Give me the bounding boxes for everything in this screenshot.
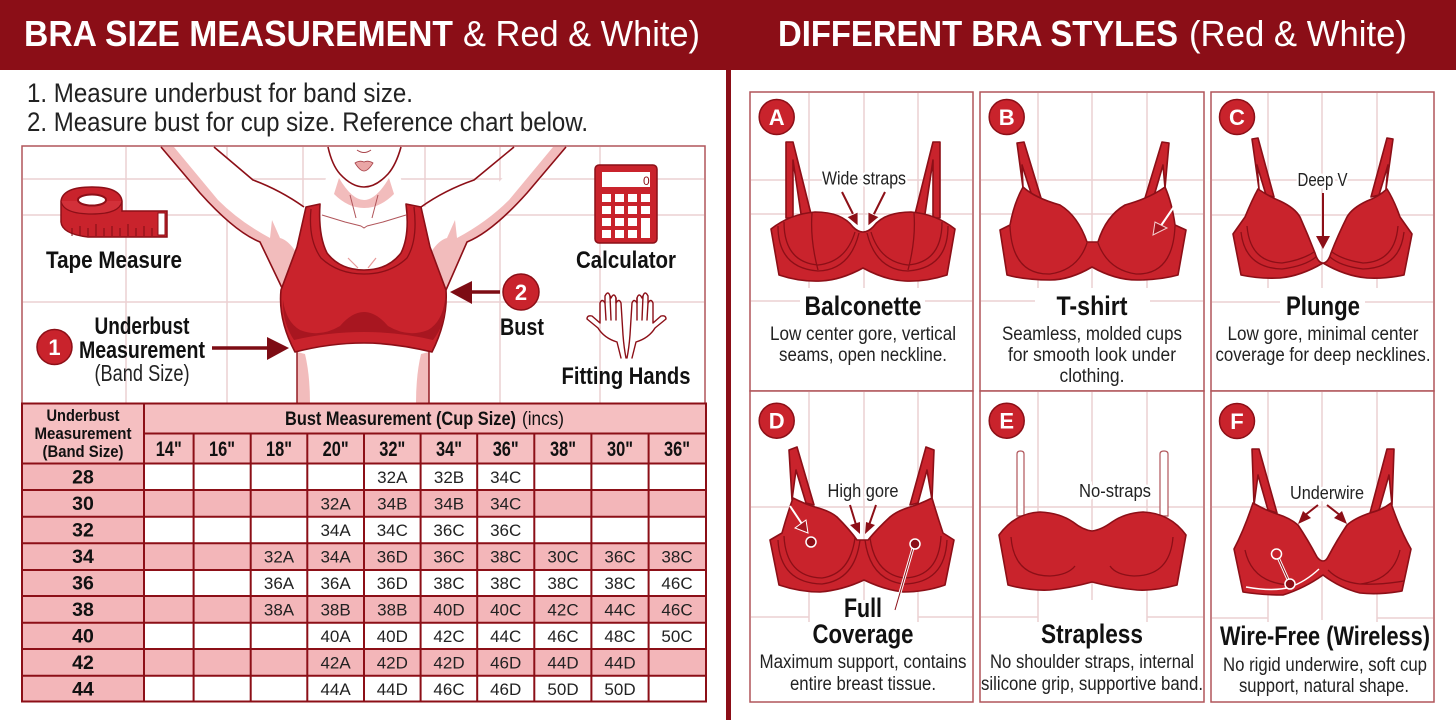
row labels: 32 [72, 520, 94, 542]
callout: bust: Bust [500, 314, 544, 341]
badge B [989, 100, 1024, 134]
badge C: C [1229, 105, 1245, 130]
size values: 46D [490, 680, 521, 699]
annotation: deep v: Deep V [1298, 170, 1348, 190]
size values: 40A [320, 627, 351, 646]
size values: 36C [433, 521, 465, 540]
annotation: pointer right [895, 539, 920, 610]
size values: 38C [490, 574, 521, 593]
description: No rigid underwire, soft cup [1223, 655, 1427, 676]
size values: 42C [547, 600, 579, 620]
column headings: 36" [493, 438, 519, 461]
size values: 34C [490, 494, 521, 514]
icon: calculator: 0 [643, 174, 650, 188]
bra illustration [1000, 142, 1186, 280]
annotation: wide straps [822, 168, 906, 226]
badge D [759, 403, 794, 438]
instructions text: 2. Measure bust for cup size. Reference chart below. [27, 107, 588, 137]
row labels [72, 466, 94, 700]
size values: 32A [320, 494, 351, 514]
size values: 46C [661, 574, 693, 593]
description [1223, 655, 1427, 697]
label: tape measure: Tape Measure [46, 247, 182, 274]
style name: Plunge [1286, 291, 1360, 321]
size values: 44D [377, 680, 408, 699]
size values: 36A [264, 574, 295, 593]
bra illustration [1234, 449, 1411, 595]
annotation: underwire: Underwire [1290, 483, 1364, 503]
size values: 34A [320, 548, 351, 566]
size values: 32A [264, 548, 295, 566]
size values [264, 468, 693, 699]
size values: 36C [490, 521, 521, 540]
size values: 44C [604, 600, 636, 620]
size values: 36D [377, 548, 408, 566]
badge F: F [1230, 409, 1244, 434]
description: for smooth look under [1008, 345, 1177, 366]
bra illustration [999, 451, 1186, 590]
annotation: pointer left [790, 506, 816, 547]
right header band [731, 0, 1456, 70]
white rows [144, 464, 706, 702]
callout: underbust: Underbust [94, 313, 190, 340]
size values: 34A [320, 521, 351, 540]
table heading: band: Measurement [34, 424, 132, 443]
size values: 36C [604, 548, 636, 566]
badge A [759, 100, 794, 134]
size values: 42D [433, 654, 465, 672]
right header band: DIFFERENT BRA STYLES [778, 13, 1178, 54]
callout: underbust: 1 [48, 335, 61, 360]
panel D: full coverage [750, 391, 973, 702]
style name: Full [844, 593, 882, 623]
size values: 50C [661, 627, 693, 646]
table heading: bust: (incs) [522, 409, 564, 430]
size values: 34B [434, 494, 464, 514]
panel A: balconette [750, 92, 973, 391]
size values: 38C [490, 548, 521, 566]
size values: 44C [490, 627, 521, 646]
size chart table [22, 404, 706, 702]
size values: 38B [377, 600, 407, 620]
instructions text: 1. Measure underbust for band size. [27, 78, 413, 108]
right header band: (Red & White) [1189, 13, 1407, 54]
badge F [1220, 404, 1254, 438]
description: Low center gore, vertical [770, 324, 956, 345]
callout: underbust [37, 313, 289, 386]
icon: tape measure [61, 187, 167, 237]
size values: 46D [490, 654, 521, 672]
style name: T-shirt [1056, 291, 1128, 321]
badge C [1220, 100, 1254, 134]
size values: 34B [377, 494, 407, 514]
callout: bust: 2 [515, 280, 527, 305]
annotation: underwire [1290, 483, 1364, 524]
bra illustration [770, 447, 954, 592]
instructions text [27, 78, 588, 137]
size values: 36D [377, 574, 408, 593]
column headings: 20" [323, 438, 349, 461]
bra illustration [771, 142, 955, 281]
panel: measurement illustration [22, 146, 705, 404]
size values: 46C [661, 600, 693, 620]
description [760, 652, 966, 695]
size values: 32B [434, 468, 464, 487]
column headings: 32" [379, 438, 405, 461]
row labels: 28 [72, 466, 94, 488]
size values: 44D [547, 654, 579, 672]
description [1002, 324, 1182, 387]
size values: 34C [377, 521, 408, 540]
size values: 36C [433, 548, 465, 566]
size values: 46C [433, 680, 465, 699]
description: Seamless, molded cups [1002, 324, 1182, 345]
panel C: plunge [1211, 92, 1434, 391]
row labels: 30 [72, 493, 94, 515]
column headings: 14" [156, 438, 182, 461]
annotation: wide straps: Wide straps [822, 168, 906, 188]
description: seams, open neckline. [779, 345, 947, 366]
size values: 50D [547, 680, 579, 699]
left header band: & Red & White) [463, 13, 700, 54]
size values: 40C [490, 600, 521, 620]
description: coverage for deep necklines. [1216, 345, 1430, 366]
description: support, natural shape. [1239, 676, 1409, 697]
column headings: 16" [209, 438, 235, 461]
center divider [726, 0, 731, 720]
left header band: BRA SIZE MEASUREMENT [24, 13, 453, 54]
label: calculator: Calculator [576, 247, 676, 274]
panel E: strapless [980, 391, 1204, 702]
badge E [989, 403, 1024, 438]
column headings [156, 438, 690, 461]
size values: 44D [604, 654, 636, 672]
column headings: 38" [550, 438, 576, 461]
bra illustration [1233, 138, 1412, 278]
panel F: wire-free [1211, 391, 1434, 702]
size values: 44A [320, 680, 351, 699]
row labels: 38 [72, 599, 94, 621]
size values: 48C [604, 627, 636, 646]
table heading: band: (Band Size) [42, 442, 124, 461]
table heading: band [34, 406, 132, 461]
annotation: high gore [828, 481, 898, 534]
style name: Strapless [1041, 619, 1143, 649]
size values: 42D [377, 654, 408, 672]
size values: 38C [433, 574, 465, 593]
size values: 30C [547, 548, 579, 566]
size values: 32A [377, 468, 408, 487]
badge A: A [769, 105, 785, 130]
style name [812, 593, 914, 649]
size values: 50D [604, 680, 636, 699]
badge E: E [999, 409, 1014, 434]
label: fitting hands: Fitting Hands [562, 363, 690, 390]
callout: underbust: Measurement [79, 337, 205, 364]
size values: 38C [661, 548, 693, 566]
column headings: 36" [664, 438, 690, 461]
table heading: band: Underbust [46, 406, 120, 425]
size values: 46C [547, 627, 579, 646]
description: No shoulder straps, internal [990, 652, 1194, 673]
description: silicone grip, supportive band. [981, 674, 1203, 695]
size values: 36A [320, 574, 351, 593]
row labels: 42 [72, 652, 94, 674]
annotation: deep v [1298, 170, 1348, 249]
icon: fitting hands [587, 293, 666, 358]
badge D: D [769, 409, 785, 434]
description: Maximum support, contains [760, 652, 966, 673]
size values: 40D [433, 600, 465, 620]
annotation: arrow [1153, 192, 1184, 235]
column headings: 34" [436, 438, 462, 461]
size values: 40D [377, 627, 408, 646]
callout: underbust: (Band Size) [94, 360, 190, 386]
description: clothing. [1060, 366, 1124, 387]
size values: 38C [547, 574, 579, 593]
annotation: no-straps: No-straps [1079, 481, 1151, 501]
description [981, 652, 1203, 695]
size values: 38B [320, 600, 351, 620]
style name: Balconette [804, 291, 922, 321]
description [770, 324, 956, 366]
style name: Coverage [812, 619, 914, 649]
description: entire breast tissue. [790, 674, 936, 695]
column headings: 18" [266, 438, 292, 461]
size values: 42A [320, 654, 351, 672]
callout: bust [450, 274, 544, 341]
icon: calculator [595, 165, 657, 243]
row labels: 34 [72, 546, 94, 568]
badge B: B [999, 105, 1015, 130]
size values: 38C [604, 574, 636, 593]
size values: 38A [264, 600, 295, 620]
row labels: 40 [72, 626, 94, 648]
panel B: t-shirt [980, 92, 1204, 391]
annotation: high gore: High gore [828, 481, 898, 501]
row labels: 44 [72, 678, 94, 700]
description: Low gore, minimal center [1228, 324, 1419, 345]
size values: 42C [433, 627, 465, 646]
left header band [0, 0, 727, 70]
description [1216, 324, 1430, 366]
size values: 34C [490, 468, 521, 487]
table heading: bust: Bust Measurement (Cup Size) [285, 409, 516, 430]
figure: woman with red sports bra [161, 147, 566, 403]
row labels: 36 [72, 572, 94, 594]
column headings: 30" [607, 438, 633, 461]
annotation: wire pointer [1246, 549, 1319, 590]
